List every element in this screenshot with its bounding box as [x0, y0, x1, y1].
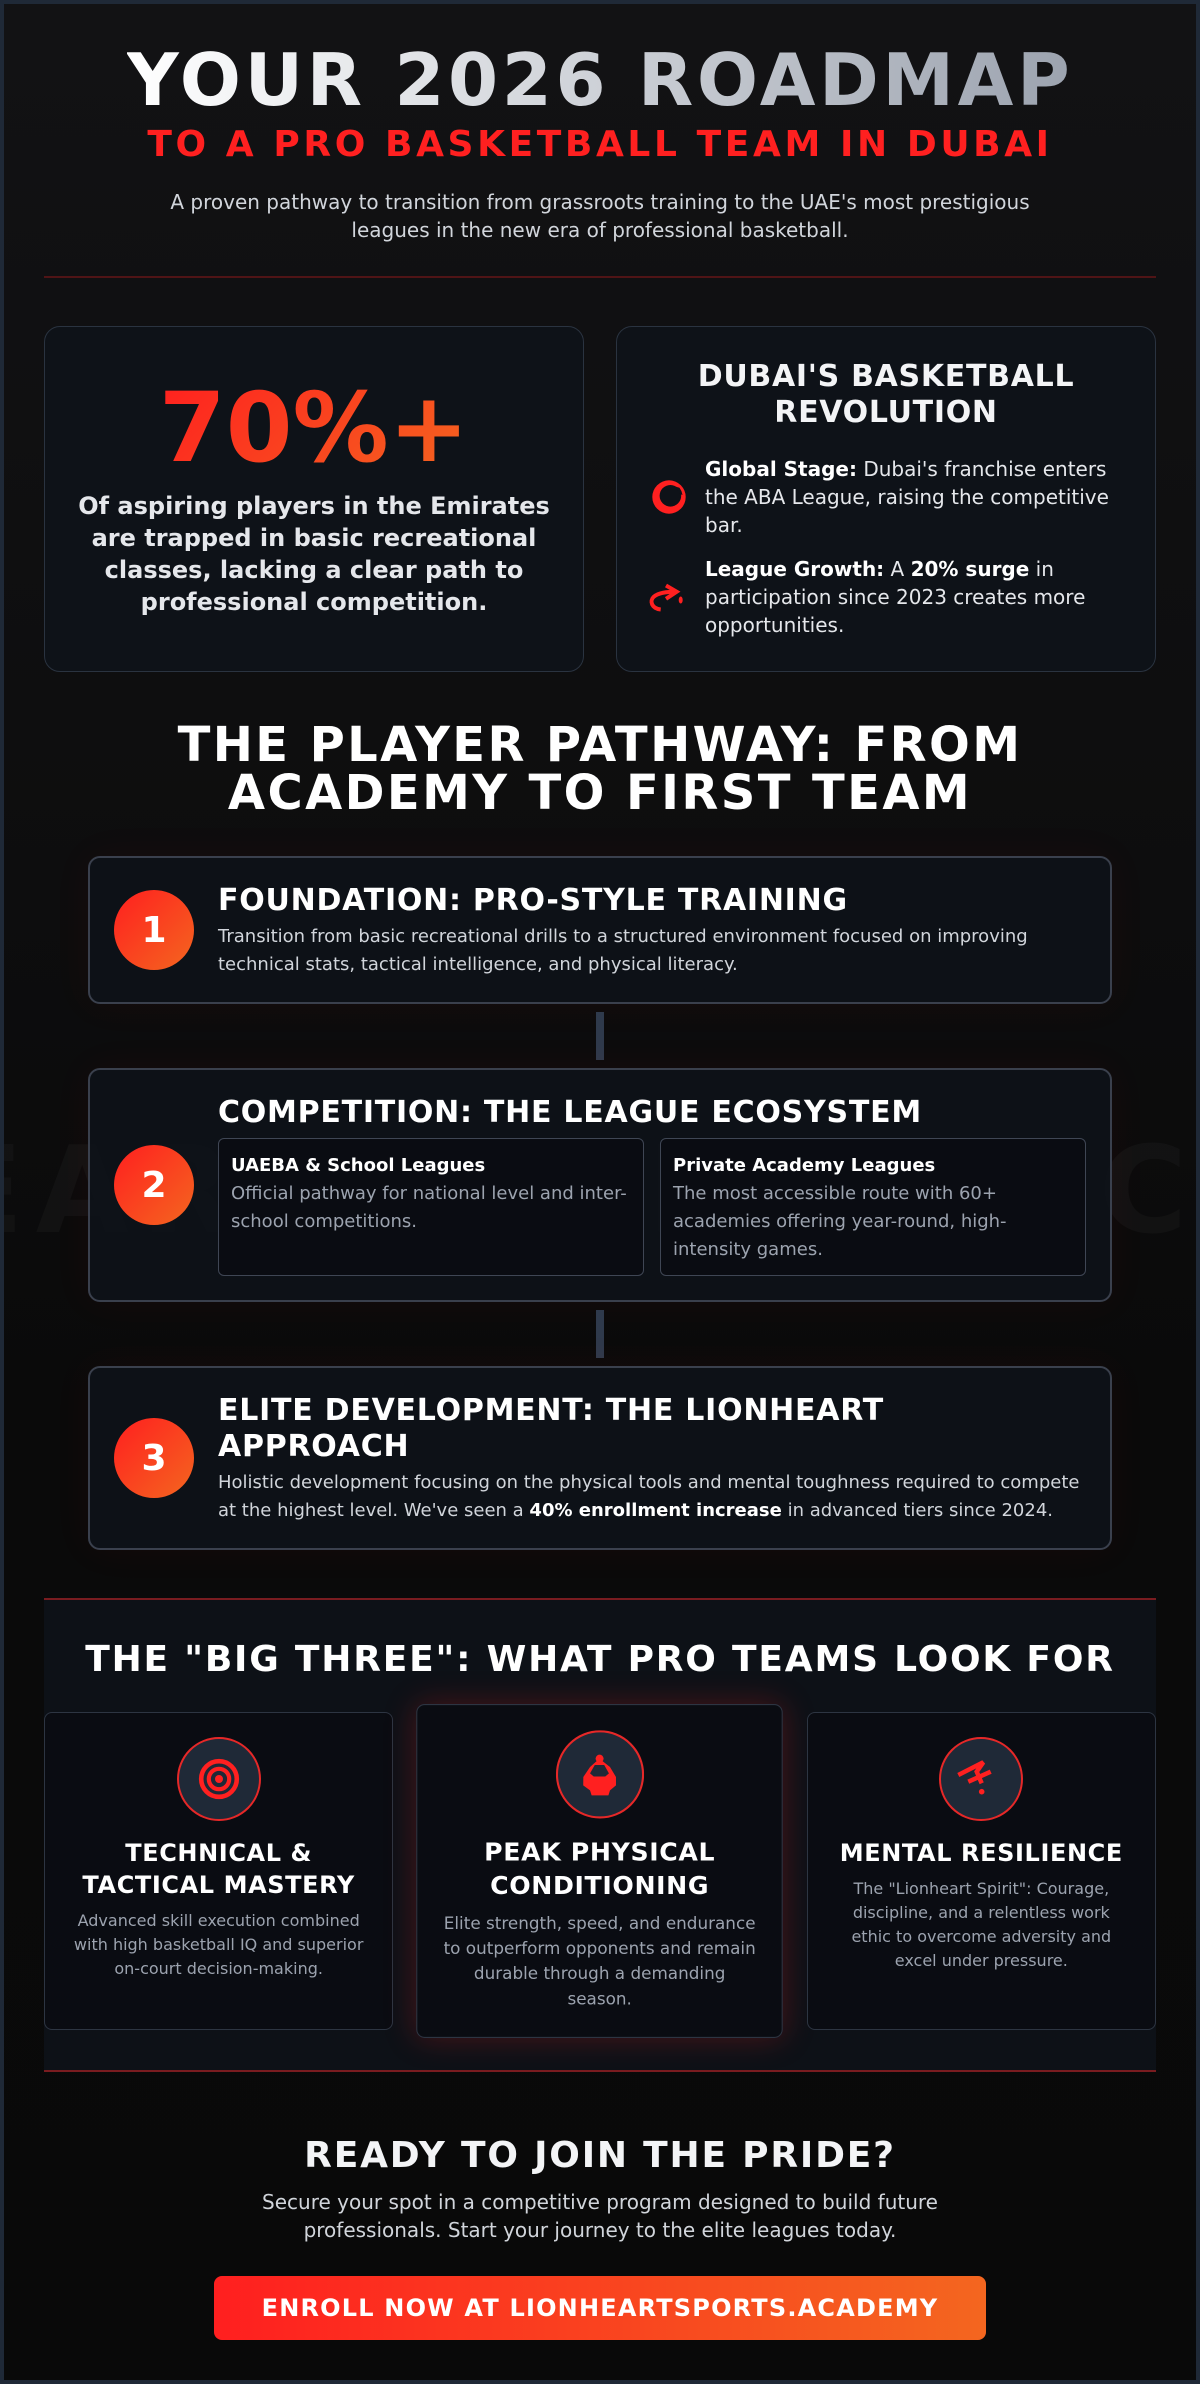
sub-panel: UAEBA: [218, 1138, 644, 1276]
sub-panel: UAEBA: UAEBA & School Leagues: [231, 1155, 485, 1176]
panel: big three: [44, 1598, 1156, 2072]
card description: with high basketball IQ and superior: [74, 1935, 363, 1954]
step 2 heading: COMPETITION: THE LEAGUE ECOSYSTEM: [218, 1095, 922, 1130]
sub-panel: private academy: academies offering year-round, high-: [673, 1211, 1007, 1232]
number badge 2: [114, 1145, 194, 1225]
sub-panel: private academy: intensity games.: [673, 1239, 823, 1260]
intro text: leagues in the new era of professional basketball.: [351, 218, 849, 242]
panel: Dubai's basketball revolution: [616, 326, 1156, 672]
text: global stage: bar.: [705, 513, 743, 537]
call to action heading: READY TO JOIN THE PRIDE?: [304, 2135, 896, 2176]
step 3 heading: [218, 1393, 884, 1464]
step 3 description: [218, 1472, 1079, 1521]
stat description: classes, lacking a clear path to: [105, 556, 523, 584]
step 1 description: [218, 926, 1028, 975]
card heading: TECHNICAL &: [125, 1839, 312, 1867]
text: league growth: [705, 557, 1085, 637]
text: league growth: League Growth: A 20% surge in: [705, 557, 1054, 581]
number badge 1: [114, 890, 194, 970]
sub-panel: private academy: [660, 1138, 1086, 1276]
sub-panel: private academy: Private Academy Leagues: [673, 1155, 935, 1176]
stat description: Of aspiring players in the Emirates: [78, 492, 550, 520]
card description: [444, 1913, 756, 2009]
card heading: PEAK PHYSICAL: [484, 1837, 716, 1867]
card description: on-court decision-making.: [114, 1959, 323, 1978]
card description: Advanced skill execution combined: [78, 1911, 360, 1930]
step 3 description: Holistic development focusing on the physical tools and mental toughness required to compete: [218, 1472, 1079, 1493]
card heading: MENTAL RESILIENCE: [840, 1839, 1123, 1867]
enroll button: [214, 2276, 986, 2340]
call to action text: [262, 2190, 938, 2242]
step 2: [88, 1068, 1112, 1302]
stat description: are trapped in basic recreational: [92, 524, 536, 552]
card description: [74, 1911, 364, 1978]
card heading: TACTICAL MASTERY: [82, 1871, 355, 1899]
icon: globe ring: [652, 480, 686, 514]
panel heading: [698, 359, 1074, 430]
step 1 heading: FOUNDATION: PRO-STYLE TRAINING: [218, 883, 848, 918]
card description: The "Lionheart Spirit": Courage,: [853, 1879, 1109, 1898]
card description: durable through a demanding: [474, 1963, 726, 1983]
card description: season.: [568, 1989, 632, 2009]
stat description: [78, 492, 550, 616]
step 1 description: Transition from basic recreational drills to a structured environment focused on improving: [218, 926, 1028, 947]
call to action text: professionals. Start your journey to the elite leagues today.: [304, 2218, 896, 2242]
card: technical mastery: [44, 1712, 393, 2030]
step 1: [88, 856, 1112, 1004]
number badge 3: [114, 1418, 194, 1498]
panel: stat 70%: [44, 326, 584, 672]
stat description: professional competition.: [141, 588, 487, 616]
card heading: CONDITIONING: [490, 1871, 710, 1900]
step 3 heading: ELITE DEVELOPMENT: THE LIONHEART: [218, 1393, 884, 1428]
panel heading: REVOLUTION: [774, 395, 998, 430]
icon: mental resilience: [939, 1737, 1023, 1821]
section heading: player pathway: ACADEMY TO FIRST TEAM: [228, 765, 972, 821]
text: league growth: opportunities.: [705, 613, 844, 637]
sub-panel: UAEBA: Official pathway for national level and inter-: [231, 1183, 627, 1204]
icon: target: [177, 1737, 261, 1821]
card heading: [82, 1839, 355, 1899]
step 1 description: technical stats, tactical intelligence, and physical literacy.: [218, 954, 738, 975]
step 3: [88, 1366, 1112, 1550]
enroll button: ENROLL NOW AT LIONHEARTSPORTS.ACADEMY: [262, 2294, 938, 2322]
card description: ethic to overcome adversity and: [851, 1927, 1111, 1946]
title: YOUR 2026 ROADMAP: [127, 38, 1073, 122]
number badge 1: 1: [141, 910, 167, 951]
text: global stage: Global Stage: Dubai's franchise enters: [705, 457, 1106, 481]
big stat number: 70%+: [159, 372, 469, 484]
step 3 description: at the highest level. We've seen a 40% enrollment increase in advanced tiers since 2024.: [218, 1500, 1053, 1521]
sub-panel: private academy: The most accessible route with 60+: [673, 1183, 997, 1204]
sub-panel: UAEBA: school competitions.: [231, 1211, 417, 1232]
intro text: [170, 190, 1030, 242]
card heading: [484, 1837, 716, 1900]
card description: excel under pressure.: [895, 1951, 1068, 1970]
section heading: player pathway: [178, 717, 1022, 821]
icon: physical conditioning: [556, 1730, 644, 1818]
big three heading: THE "BIG THREE": WHAT PRO TEAMS LOOK FOR: [85, 1639, 1115, 1680]
text: league growth: participation since 2023 creates more: [705, 585, 1085, 609]
call to action text: Secure your spot in a competitive program designed to build future: [262, 2190, 938, 2214]
card description: Elite strength, speed, and endurance: [444, 1913, 756, 1933]
card: mental resilience: [807, 1712, 1156, 2030]
section heading: player pathway: THE PLAYER PATHWAY: FROM: [178, 717, 1022, 773]
text: global stage: [705, 457, 1109, 537]
connector 2: [596, 1310, 604, 1358]
number badge 3: 3: [141, 1438, 167, 1479]
icon: growth arrow: [650, 584, 683, 612]
card description: to outperform opponents and remain: [444, 1938, 756, 1958]
subtitle: TO A PRO BASKETBALL TEAM IN DUBAI: [147, 124, 1053, 165]
card description: discipline, and a relentless work: [853, 1903, 1110, 1922]
intro text: A proven pathway to transition from grassroots training to the UAE's most prestigious: [170, 190, 1030, 214]
step 3 heading: APPROACH: [218, 1429, 409, 1464]
text: global stage: the ABA League, raising the competitive: [705, 485, 1109, 509]
card: peak physical conditioning: [417, 1704, 783, 2038]
number badge 2: 2: [141, 1165, 167, 1206]
connector 1: [596, 1012, 604, 1060]
card description: [851, 1879, 1111, 1970]
panel heading: DUBAI'S BASKETBALL: [698, 359, 1074, 394]
